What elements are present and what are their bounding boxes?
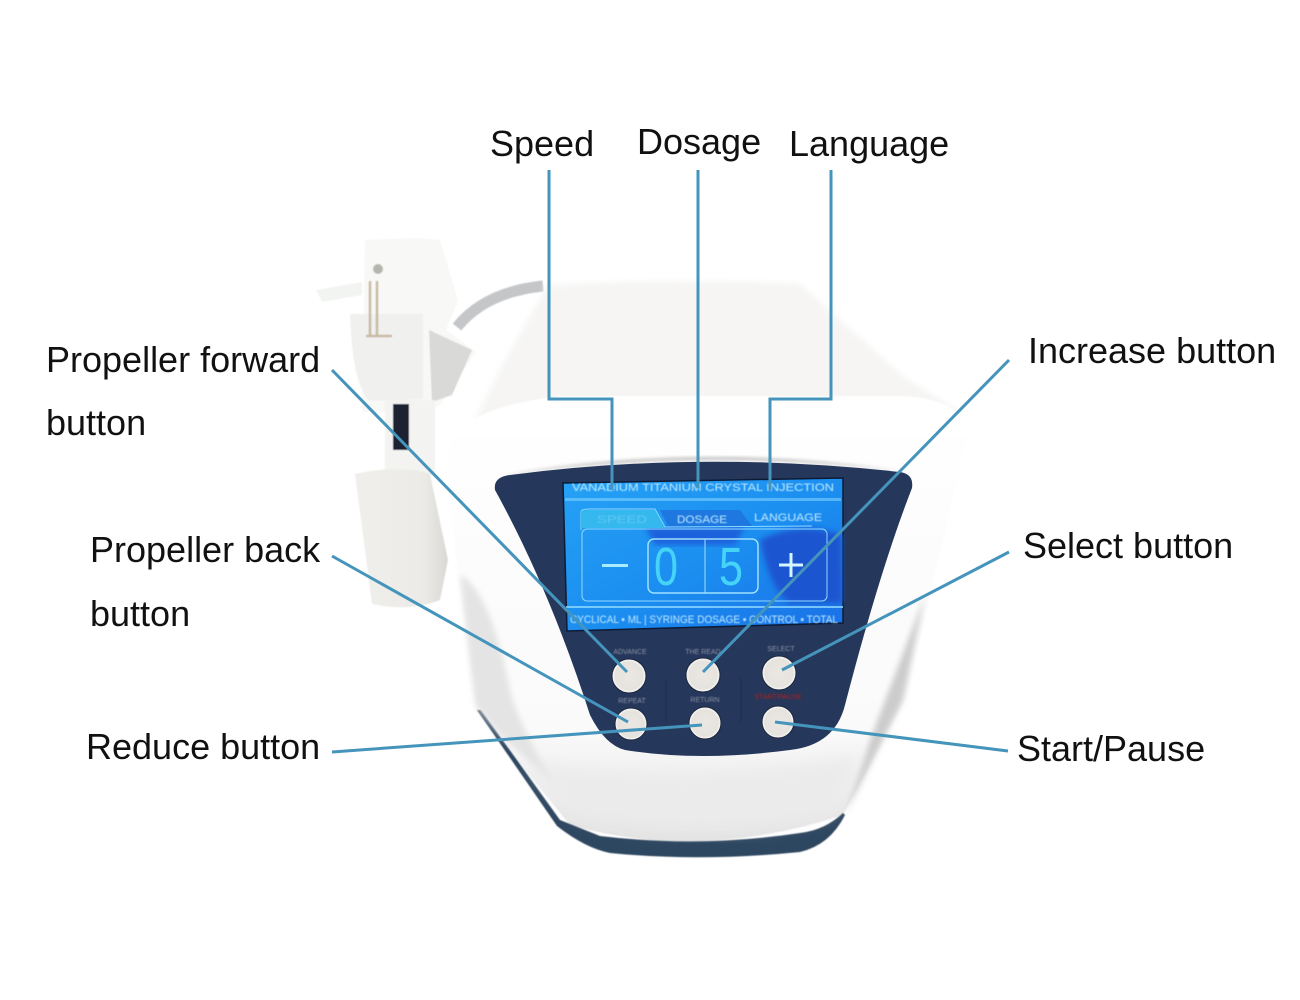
button captions: START/PAUSE [754, 694, 802, 701]
device body [446, 281, 970, 857]
display screen: LANGUAGE [754, 512, 822, 524]
button captions: RETURN [690, 697, 720, 704]
label: Increase button [703, 330, 1276, 672]
label: Language: Language [789, 123, 949, 164]
screen title: VANADIUM TITANIUM CRYSTAL INJECTION [572, 482, 834, 494]
label: Reduce button: Reduce button [86, 726, 320, 767]
label: Start/Pause [775, 722, 1205, 769]
label: Dosage: Dosage [637, 121, 761, 162]
label: Propeller forward button: button [46, 402, 146, 443]
icon: injector handpiece [316, 238, 543, 607]
display screen: SPEED [597, 514, 647, 526]
button captions: SELECT [767, 646, 795, 653]
screen readout: 0 [654, 537, 678, 597]
label: Language [770, 123, 949, 490]
label: Increase button: Increase button [1028, 330, 1276, 371]
label: Speed: Speed [490, 123, 594, 164]
label: Propeller forward button [46, 339, 627, 672]
label: Select button [782, 525, 1233, 670]
button captions: THE READ [685, 649, 721, 656]
label: Propeller forward button: Propeller forward [46, 339, 320, 380]
label: Select button: Select button [1023, 525, 1233, 566]
label: Start/Pause: Start/Pause [1017, 728, 1205, 769]
label: Speed [490, 123, 612, 490]
display screen: DOSAGE [677, 514, 727, 526]
display screen [563, 478, 843, 631]
buttons [612, 656, 796, 740]
display screen: CYCLICAL ▪ ML | SYRINGE DOSAGE ▪ CONTROL ▪ TOTAL [570, 614, 838, 626]
button captions: ADVANCE [613, 649, 647, 656]
label: Propeller back button: Propeller back [90, 529, 321, 570]
label: Reduce button [86, 725, 702, 767]
button captions: REPEAT [618, 698, 646, 705]
display screen: 5 [719, 537, 743, 597]
button captions [613, 646, 802, 705]
panel: control panel [495, 462, 912, 756]
label: Propeller back button: button [90, 593, 190, 634]
label: Propeller back button [90, 529, 628, 722]
